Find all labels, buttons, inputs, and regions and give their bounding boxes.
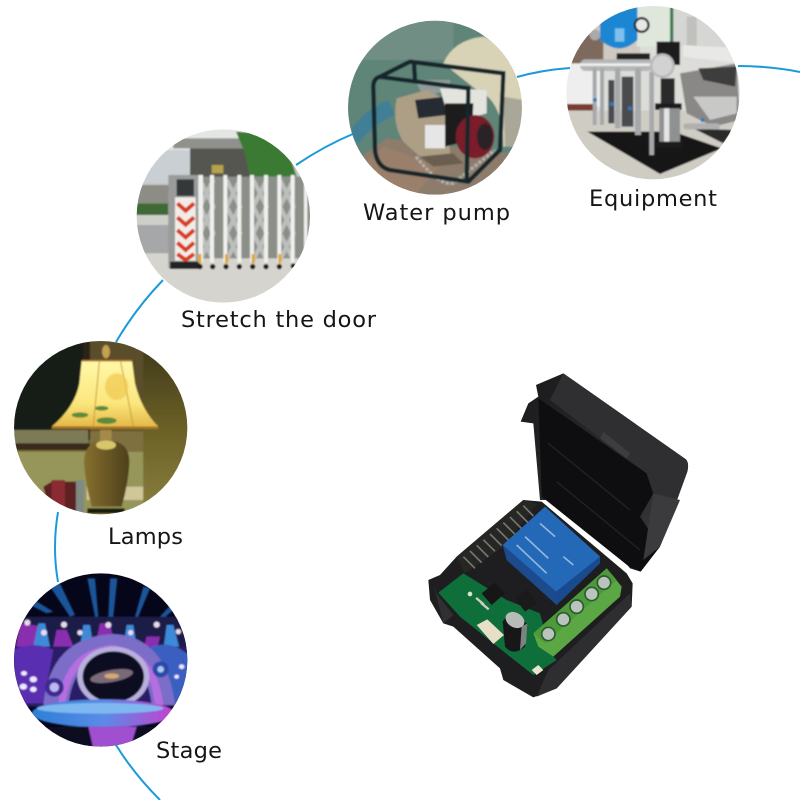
photo: stretch door (135, 127, 312, 303)
photo: stage (13, 572, 190, 750)
device base (428, 500, 633, 697)
device lid (521, 373, 688, 572)
led (532, 665, 543, 675)
label: lamps: Lamps (108, 524, 183, 550)
green terminal block (533, 568, 622, 657)
antenna module (457, 500, 537, 573)
circuit board (438, 573, 557, 675)
label: stage: Stage (156, 738, 222, 764)
photo: water pump (347, 20, 523, 197)
capacitor (503, 609, 527, 652)
label: stretch the door: Stretch the door (181, 307, 377, 333)
photo: equipment (563, 3, 743, 184)
label: equipment: Equipment (589, 186, 717, 212)
blue relay (503, 507, 600, 605)
photo: lamp (13, 340, 190, 517)
white connector (477, 619, 504, 644)
ic chip (482, 583, 505, 605)
device: open relay receiver box (428, 373, 688, 697)
label: water pump: Water pump (363, 200, 510, 226)
